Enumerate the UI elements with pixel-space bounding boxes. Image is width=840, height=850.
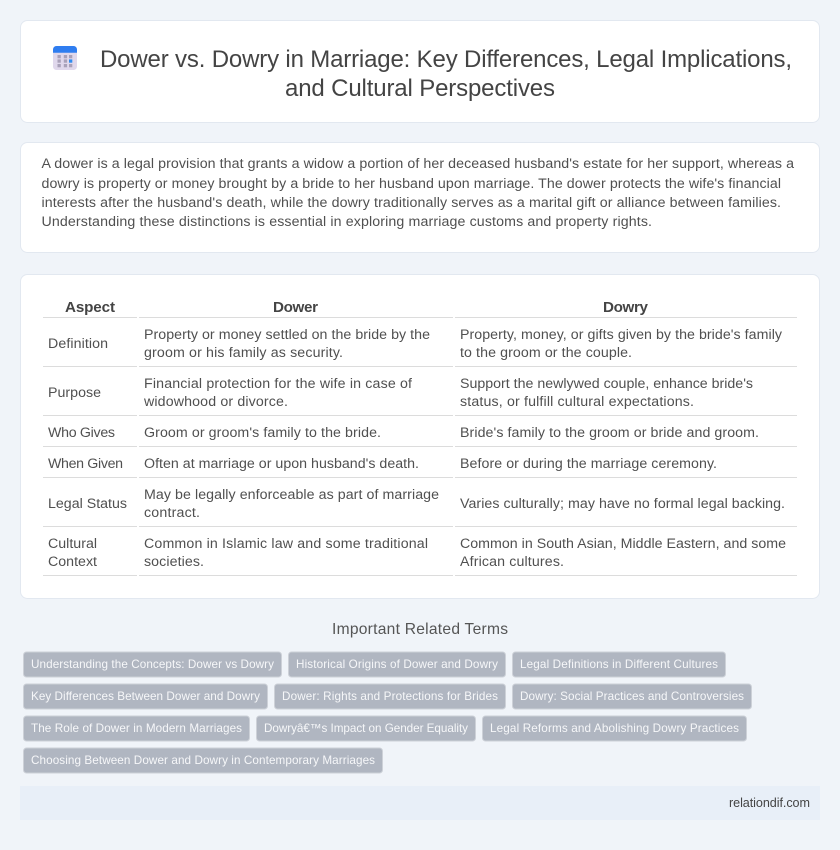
- row: purpose: widowhood or divorce.: [143, 394, 288, 410]
- title: and Cultural Perspectives: [285, 75, 555, 102]
- tag: Key Differences Between Dower and Dowry: [31, 690, 260, 703]
- row: definition: to the groom or the couple.: [460, 345, 632, 361]
- table header: [43, 299, 797, 318]
- text block: definition summary: Understanding these distinctions is essential in exploring marriage customs and property rights.: [42, 214, 652, 230]
- row: legal status: Legal Status: [48, 496, 127, 512]
- tag: [24, 716, 250, 741]
- tag: Dowryâ€™s Impact on Gender Equality: [264, 722, 468, 735]
- tag list: related terms: [24, 652, 752, 773]
- table header: Aspect: [65, 299, 115, 316]
- row: legal status: [43, 487, 797, 527]
- row: legal status: contract.: [144, 505, 200, 521]
- title: [100, 46, 792, 102]
- tag: Choosing Between Dower and Dowry in Contemporary Marriages: [31, 754, 375, 767]
- row: definition: Property or money settled on the bride by the: [144, 327, 430, 343]
- row: definition: [43, 327, 797, 367]
- row: cultural context: Common in Islamic law and some traditional: [144, 536, 428, 552]
- tag: [24, 684, 268, 709]
- row: purpose: status, or fulfill cultural expectations.: [460, 394, 694, 410]
- text block: definition summary: dowry is property or money brought by a bride to her husband upon marriage. The dower protects the wife's financial: [42, 176, 781, 192]
- row: cultural context: societies.: [144, 554, 204, 570]
- tag: Understanding the Concepts: Dower vs Dowry: [31, 658, 274, 671]
- tag: [24, 652, 282, 677]
- row: when given: [43, 456, 797, 478]
- tag: Legal Reforms and Abolishing Dowry Practices: [490, 722, 739, 735]
- row: purpose: Purpose: [48, 385, 101, 401]
- tag: [512, 652, 726, 677]
- row: cultural context: African cultures.: [460, 554, 564, 570]
- row: definition: groom or his family as security.: [144, 345, 343, 361]
- row: legal status: Varies culturally; may have no formal legal backing.: [460, 496, 785, 512]
- table header: Dower: [273, 299, 318, 316]
- text block: definition summary: interests after the husband's death, while the dowry traditionally serves as a marital gift or alliance between families.: [42, 195, 781, 211]
- row: cultural context: Common in South Asian, Middle Eastern, and some: [460, 536, 786, 552]
- tag: [512, 684, 752, 709]
- row: cultural context: [43, 536, 797, 576]
- tag: [482, 716, 746, 741]
- row: who gives: Bride's family to the groom or bride and groom.: [460, 425, 759, 441]
- row: legal status: May be legally enforceable as part of marriage: [144, 487, 439, 503]
- tag: [274, 684, 506, 709]
- row: who gives: Who Gives: [48, 425, 115, 441]
- footer bar: relationdif.com: [729, 796, 810, 810]
- row: definition: Property, money, or gifts given by the bride's family: [460, 327, 783, 343]
- tag: Dower: Rights and Protections for Brides: [282, 690, 498, 703]
- row: purpose: Financial protection for the wife in case of: [144, 376, 412, 392]
- row: purpose: [43, 376, 797, 416]
- panel: intro paragraph: [20, 142, 820, 252]
- row: when given: Before or during the marriage ceremony.: [460, 456, 717, 472]
- row: cultural context: Cultural: [48, 536, 97, 552]
- panel: title header: [20, 20, 820, 122]
- tag: The Role of Dower in Modern Marriages: [31, 722, 242, 735]
- row: who gives: [43, 425, 797, 447]
- row: who gives: Groom or groom's family to the bride.: [144, 425, 381, 441]
- text block: definition summary: A dower is a legal provision that grants a widow a portion of her deceased husband's estate for her support, whereas a: [42, 156, 794, 172]
- panel: comparison table: [20, 274, 820, 598]
- tag: [256, 716, 476, 741]
- row: definition: Definition: [48, 336, 108, 352]
- text block: definition summary: [42, 156, 794, 230]
- row: purpose: Support the newlywed couple, enhance bride's: [460, 376, 753, 392]
- tag: Historical Origins of Dower and Dowry: [296, 658, 498, 671]
- footer bar: [20, 786, 820, 820]
- tag: Dowry: Social Practices and Controversies: [520, 690, 744, 703]
- tag: Legal Definitions in Different Cultures: [520, 658, 718, 671]
- icon: calendar: [53, 46, 77, 70]
- title: Dower vs. Dowry in Marriage: Key Differences, Legal Implications,: [100, 46, 792, 73]
- row: when given: When Given: [48, 456, 123, 472]
- row: when given: Often at marriage or upon husband's death.: [144, 456, 419, 472]
- heading: important related terms: Important Related Terms: [332, 621, 508, 638]
- tag: [24, 748, 382, 773]
- table header: Dowry: [603, 299, 649, 316]
- row: cultural context: Context: [48, 554, 97, 570]
- tag: [288, 652, 506, 677]
